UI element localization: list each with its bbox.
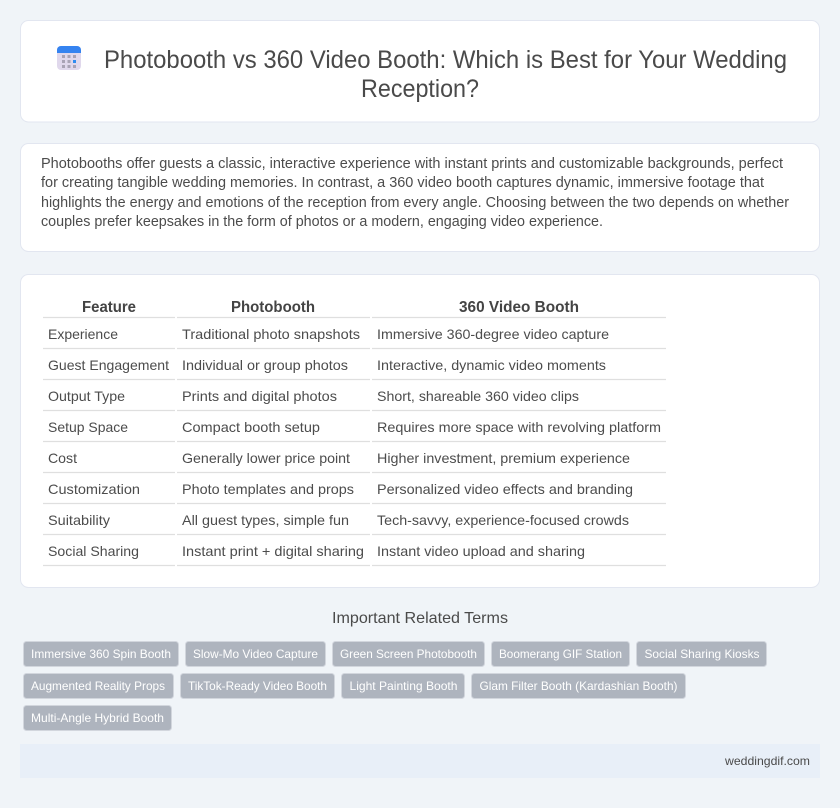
tag (24, 706, 172, 730)
related term tags (24, 642, 766, 730)
title: Photobooth vs 360 Video Booth: Which is Best for Your Wedding (104, 46, 787, 74)
row: experience (48, 326, 609, 342)
tag (180, 674, 334, 698)
row: setup space (48, 419, 661, 435)
tag: Glam Filter Booth (Kardashian Booth) (480, 679, 678, 693)
tag (636, 642, 766, 666)
row: customization: Customization (48, 481, 140, 497)
tag: Green Screen Photobooth (340, 647, 477, 661)
title (104, 46, 787, 103)
table header (82, 299, 579, 316)
row: experience: Traditional photo snapshots (182, 326, 360, 342)
tag: Boomerang GIF Station (499, 647, 622, 661)
row: output type: Short, shareable 360 video clips (377, 388, 579, 404)
row: output type (48, 388, 579, 404)
row: guest engagement: Guest Engagement (48, 357, 169, 373)
row: cost: Cost (48, 450, 77, 466)
row: suitability (48, 512, 629, 528)
row: social sharing: Instant print + digital sharing (182, 543, 364, 559)
tag: Light Painting Booth (350, 679, 458, 693)
row: cost: Higher investment, premium experience (377, 450, 630, 466)
table header: Photobooth (231, 299, 315, 316)
row: guest engagement (48, 357, 606, 373)
tag: Augmented Reality Props (31, 679, 165, 693)
row: cost: Generally lower price point (182, 450, 350, 466)
row: suitability: Suitability (48, 512, 110, 528)
row: guest engagement: Interactive, dynamic video moments (377, 357, 606, 373)
title: Reception? (361, 75, 479, 103)
row: customization (48, 481, 633, 497)
panel: comparison table (20, 274, 820, 588)
row: setup space: Compact booth setup (182, 419, 320, 435)
intro paragraph: couples prefer keepsakes in the form of photos or a modern, engaging video experience. (41, 214, 603, 230)
footer (20, 744, 820, 778)
tag (186, 642, 326, 666)
tag (332, 642, 484, 666)
row: suitability: Tech-savvy, experience-focused crowds (377, 512, 629, 528)
row: output type: Output Type (48, 388, 125, 404)
row: suitability: All guest types, simple fun (182, 512, 349, 528)
tag (472, 674, 686, 698)
tag: Social Sharing Kiosks (644, 647, 760, 661)
table header: 360 Video Booth (459, 299, 579, 316)
row: output type: Prints and digital photos (182, 388, 337, 404)
table header: Feature (82, 299, 136, 316)
row: experience: Experience (48, 326, 118, 342)
heading: related terms: Important Related Terms (332, 610, 508, 627)
tag: TikTok-Ready Video Booth (188, 679, 327, 693)
tag: Immersive 360 Spin Booth (31, 647, 171, 661)
tag: Multi-Angle Hybrid Booth (31, 711, 164, 725)
row: setup space: Setup Space (48, 419, 128, 435)
icon: calendar (57, 46, 81, 70)
tag (24, 674, 174, 698)
row: social sharing: Social Sharing (48, 543, 139, 559)
row: guest engagement: Individual or group photos (182, 357, 348, 373)
intro paragraph: for creating tangible wedding memories. In contrast, a 360 video booth captures dynamic, immersive footage that (41, 175, 764, 191)
panel: title header (20, 20, 820, 122)
row: customization: Photo templates and props (182, 481, 354, 497)
intro paragraph (41, 156, 789, 230)
row: social sharing: Instant video upload and sharing (377, 543, 585, 559)
tag (24, 642, 178, 666)
panel: introduction (20, 144, 820, 252)
footer: weddingdif.com (724, 754, 810, 768)
row: customization: Personalized video effects and branding (377, 481, 633, 497)
intro paragraph: highlights the energy and emotions of the reception from every angle. Choosing between the two depends on whether (41, 195, 789, 211)
row: cost (48, 450, 630, 466)
row: experience: Immersive 360-degree video capture (377, 326, 609, 342)
row: social sharing (48, 543, 585, 559)
tag: Slow-Mo Video Capture (193, 647, 318, 661)
intro paragraph: Photobooths offer guests a classic, interactive experience with instant prints and customizable backgrounds, perfect (41, 156, 783, 172)
tag (342, 674, 464, 698)
tag (492, 642, 630, 666)
row: setup space: Requires more space with revolving platform (377, 419, 661, 435)
